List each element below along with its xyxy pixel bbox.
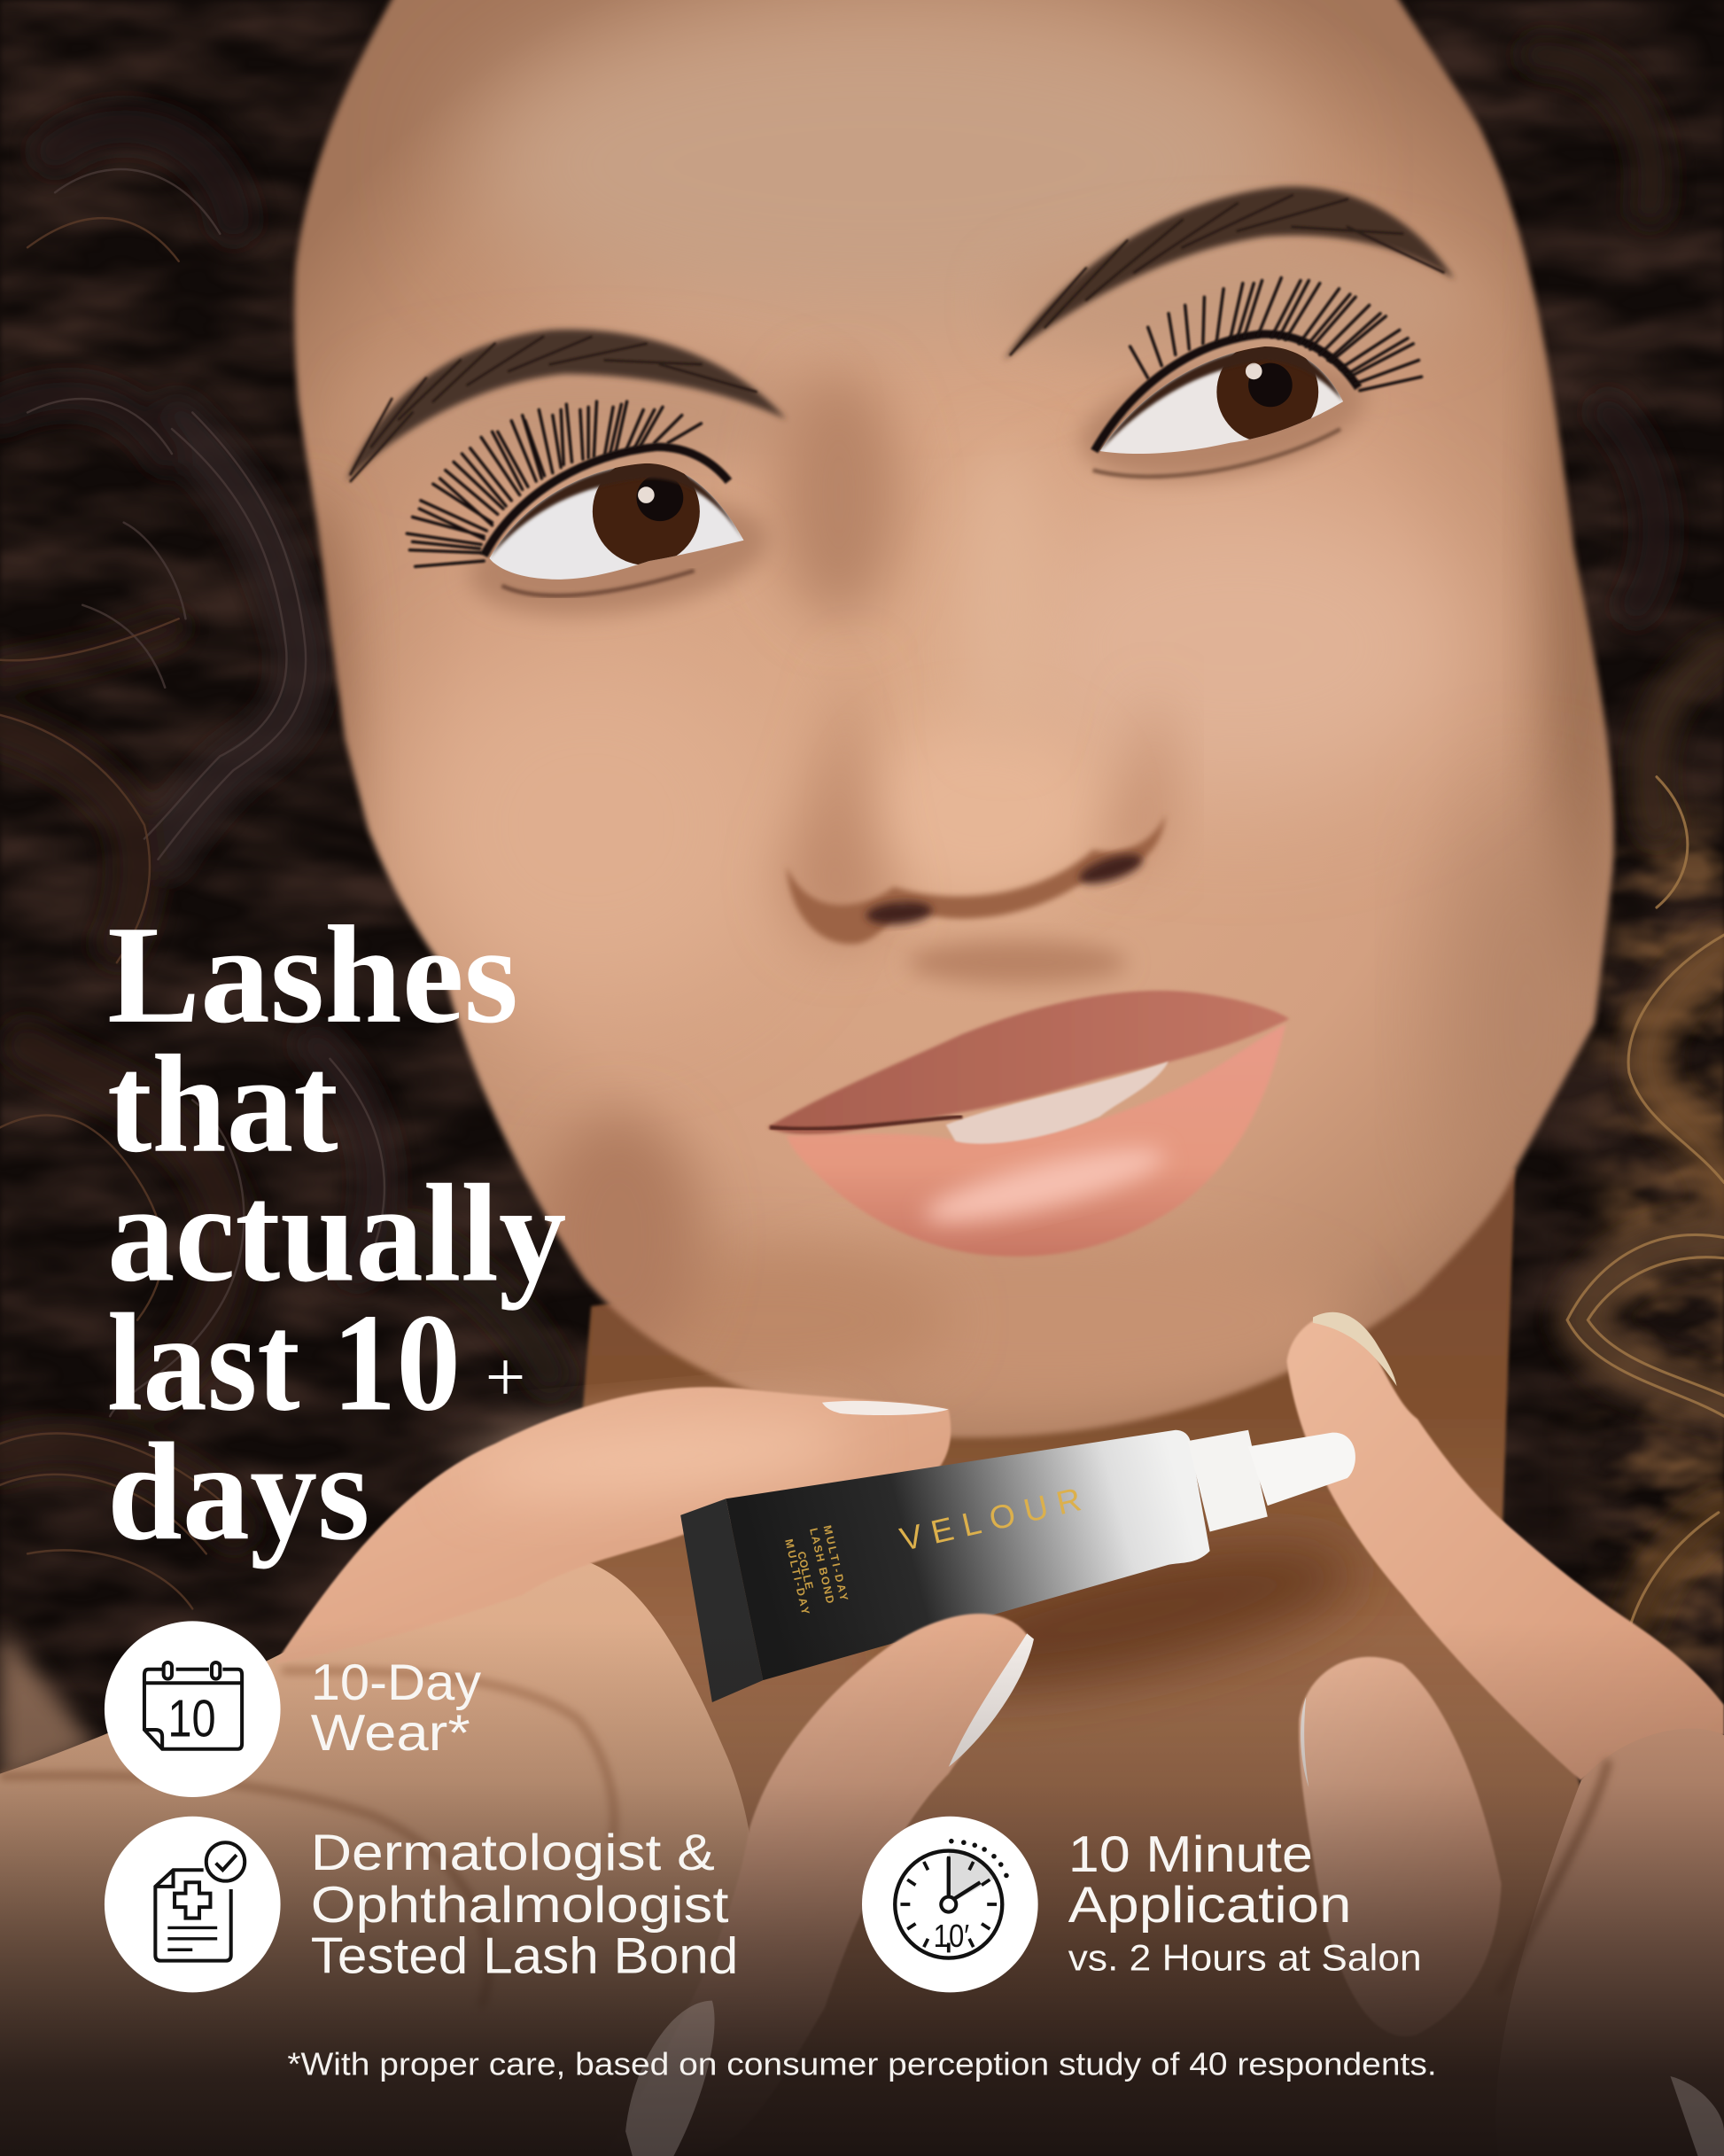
nail: index finger: [822, 1401, 949, 1415]
eye white and iris: [489, 463, 744, 580]
shadow beneath tube: [888, 1514, 1367, 1718]
right eye: [1004, 186, 1455, 499]
label: vs. 2 Hours at Salon: [1068, 1937, 1422, 1979]
headline: actually: [107, 1156, 566, 1312]
icon: medical document: [105, 1817, 281, 1992]
icon: calendar: [105, 1621, 281, 1797]
lips: [767, 991, 1290, 1257]
nose: [784, 440, 1168, 985]
tube small label: MULTI-DAY: [821, 1524, 850, 1602]
label: [1068, 1826, 1422, 1979]
footnote: *With proper care, based on consumer perception study of 40 respondents.: [287, 2046, 1437, 2082]
far right hand: [1495, 1729, 1724, 2156]
label: [311, 1654, 481, 1762]
broad soft curl locks: [0, 55, 1724, 1623]
headline: +: [485, 1338, 525, 1417]
nail: right finger: [1313, 1312, 1397, 1386]
label: 10 Minute: [1068, 1826, 1313, 1883]
icon: clock: 10′: [934, 1919, 969, 1954]
bottom dark gradient: [0, 1623, 1724, 2156]
feature: tested: [105, 1817, 738, 1992]
headline: days: [107, 1414, 369, 1569]
brow: [1004, 186, 1455, 361]
headline: Lashes: [107, 898, 518, 1053]
product tube: [680, 1430, 1355, 1702]
left hand: [0, 1387, 951, 2156]
label: Dermatologist &: [311, 1825, 715, 1881]
headline: last 10: [107, 1285, 461, 1440]
face: [291, 0, 1618, 1441]
tube small label: [782, 1524, 850, 1616]
label: 10-Day: [311, 1654, 481, 1711]
left eye: [346, 330, 787, 633]
icon: calendar: 10: [167, 1691, 216, 1748]
lower right finger: [1299, 1657, 1502, 2036]
bottom nails: [625, 2001, 1724, 2156]
tube small label: COLLE: [795, 1550, 816, 1591]
label: Tested Lash Bond: [311, 1928, 738, 1985]
label: Ophthalmologist: [311, 1877, 729, 1934]
thumb and lower right fingers: [605, 1614, 1724, 2156]
nail: thumb: [949, 1633, 1034, 1767]
eye white and iris: [1100, 346, 1343, 454]
neck: [523, 1169, 1581, 2156]
feature: 10-day wear: [105, 1621, 481, 1797]
tube small label: MULTI-DAY: [782, 1537, 812, 1616]
label: Wear*: [311, 1705, 470, 1762]
feature: 10 minute: [862, 1817, 1422, 1992]
tube small label: LASH BOND: [807, 1527, 836, 1605]
right pointing finger: [1287, 1312, 1724, 1780]
headline: [107, 898, 566, 1569]
brow: [346, 330, 787, 481]
label: Application: [1068, 1877, 1351, 1934]
headline: that: [107, 1027, 338, 1182]
index finger: [275, 1387, 951, 1664]
label: [311, 1825, 738, 1985]
icon: clock: [862, 1817, 1038, 1992]
tube brand label: VELOUR: [897, 1480, 1084, 1558]
